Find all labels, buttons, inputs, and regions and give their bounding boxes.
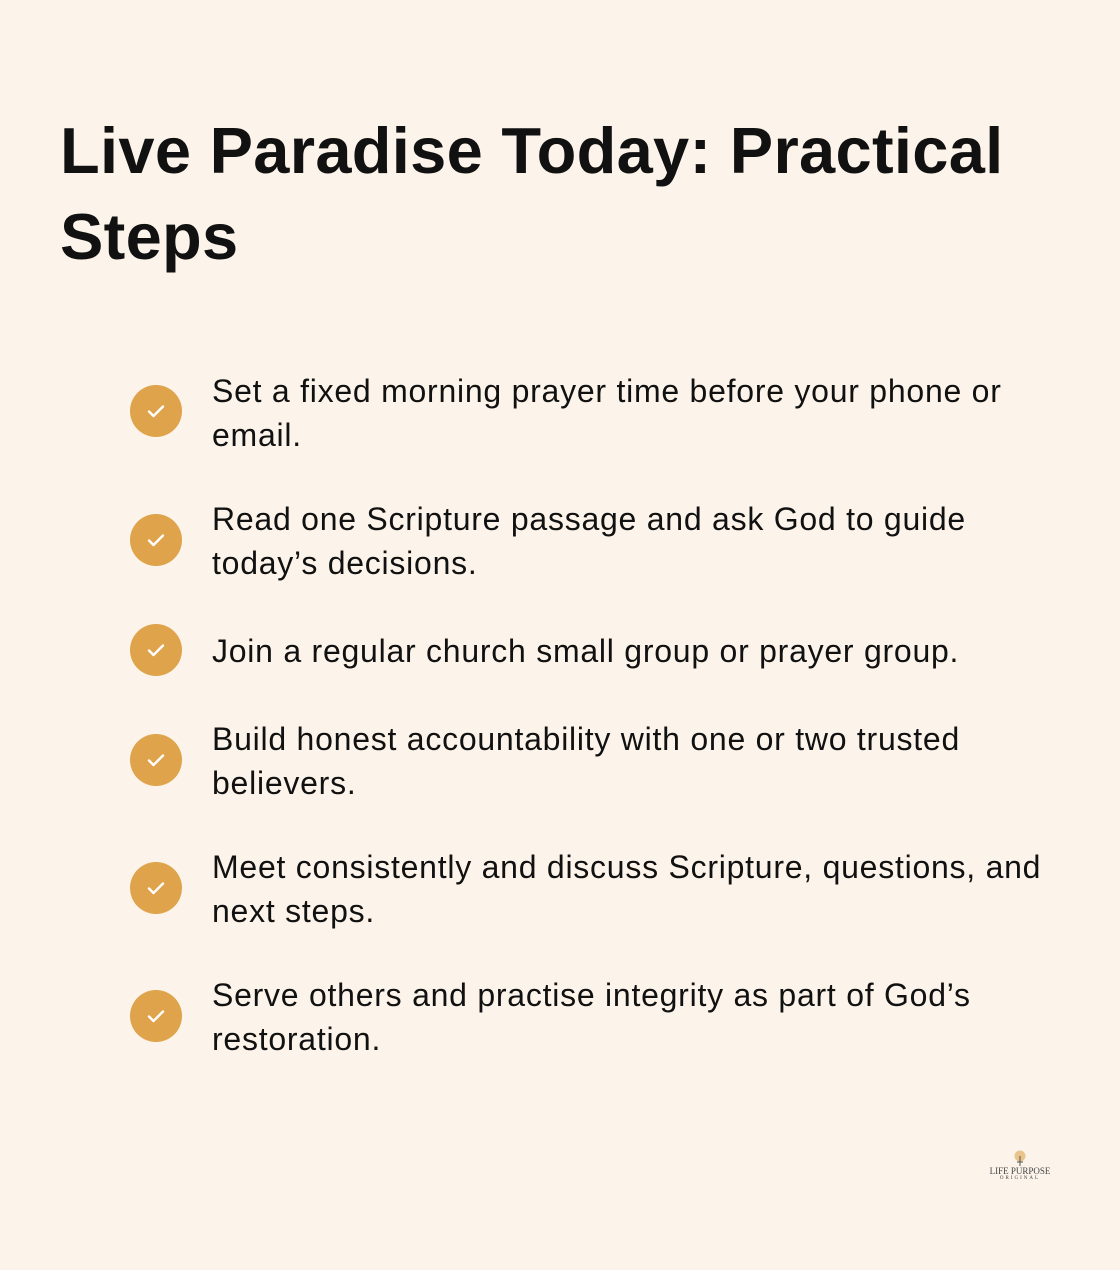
icon: check (130, 734, 182, 786)
item 5 (130, 849, 1041, 929)
item 1 (130, 373, 1002, 453)
text: Set a fixed morning prayer time before your phone or (212, 373, 1002, 409)
icon: check (130, 514, 182, 566)
text: email. (212, 417, 302, 453)
text: Join a regular church small group or prayer group. (212, 633, 959, 669)
text (212, 373, 1002, 453)
text: Serve others and practise integrity as part of God’s (212, 977, 971, 1013)
text: today’s decisions. (212, 545, 478, 581)
text: restoration. (212, 1021, 381, 1057)
icon: check (130, 624, 182, 676)
logo: LIFE PURPOSE (990, 1166, 1050, 1176)
text: Read one Scripture passage and ask God to guide (212, 501, 966, 537)
item 4 (130, 721, 960, 801)
title: Live Paradise Today: Practical (60, 114, 1004, 187)
text: believers. (212, 765, 356, 801)
text (212, 501, 966, 581)
text: next steps. (212, 893, 375, 929)
text (212, 721, 960, 801)
text: Build honest accountability with one or two trusted (212, 721, 960, 757)
text (212, 849, 1041, 929)
text (212, 977, 971, 1057)
title: Steps (60, 200, 239, 273)
logo: ORIGINAL (1000, 1176, 1040, 1181)
item 3 (130, 624, 959, 676)
logo (990, 1150, 1050, 1181)
icon: check (130, 990, 182, 1042)
icon: check (130, 862, 182, 914)
icon: check (130, 385, 182, 437)
title (60, 114, 1004, 273)
item 2 (130, 501, 966, 581)
item 6 (130, 977, 971, 1057)
text: Meet consistently and discuss Scripture, questions, and (212, 849, 1041, 885)
